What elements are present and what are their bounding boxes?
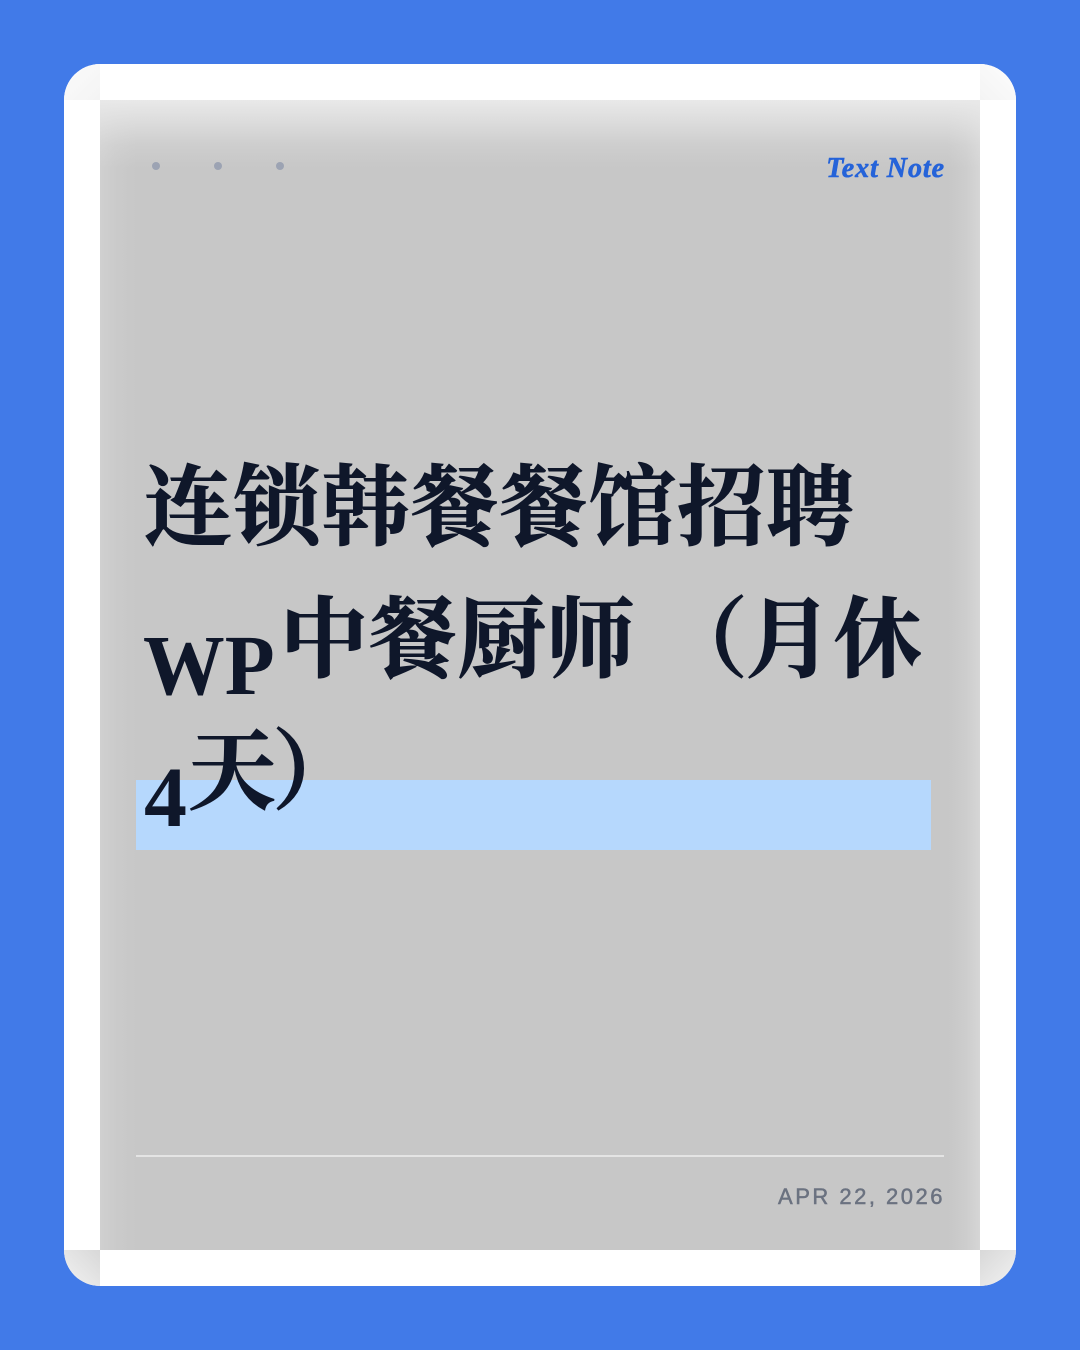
title bbox=[143, 438, 923, 845]
title line 3: number: 4 bbox=[144, 749, 187, 845]
date: APR 22, 2026 bbox=[778, 1184, 945, 1209]
corner: bottom left bbox=[64, 1250, 100, 1286]
title line 1: 连锁韩餐餐馆招聘 bbox=[144, 438, 855, 564]
dot 2 bbox=[214, 162, 222, 170]
brand label: Text Note bbox=[826, 153, 945, 184]
title highlight bar bbox=[136, 780, 931, 850]
title line 3: closing bracket: ） bbox=[272, 702, 361, 828]
corner: bottom right bbox=[980, 1250, 1016, 1286]
title line 2: latin: WP bbox=[143, 617, 275, 713]
title line 3: days: 天 bbox=[188, 702, 277, 828]
title line 2: month off: 月休 bbox=[745, 570, 923, 696]
corner: top left bbox=[64, 64, 100, 100]
dot 1 bbox=[152, 162, 160, 170]
card frame bbox=[64, 64, 1016, 1286]
dot 3 bbox=[276, 162, 284, 170]
corner: top right bbox=[980, 64, 1016, 100]
window dots bbox=[152, 162, 284, 170]
footer divider bbox=[136, 1155, 944, 1157]
title line 2: dish role: 中餐厨师 bbox=[280, 570, 636, 696]
title line 2: opening bracket: （ bbox=[660, 570, 749, 696]
panel: gray note page bbox=[100, 100, 980, 1250]
